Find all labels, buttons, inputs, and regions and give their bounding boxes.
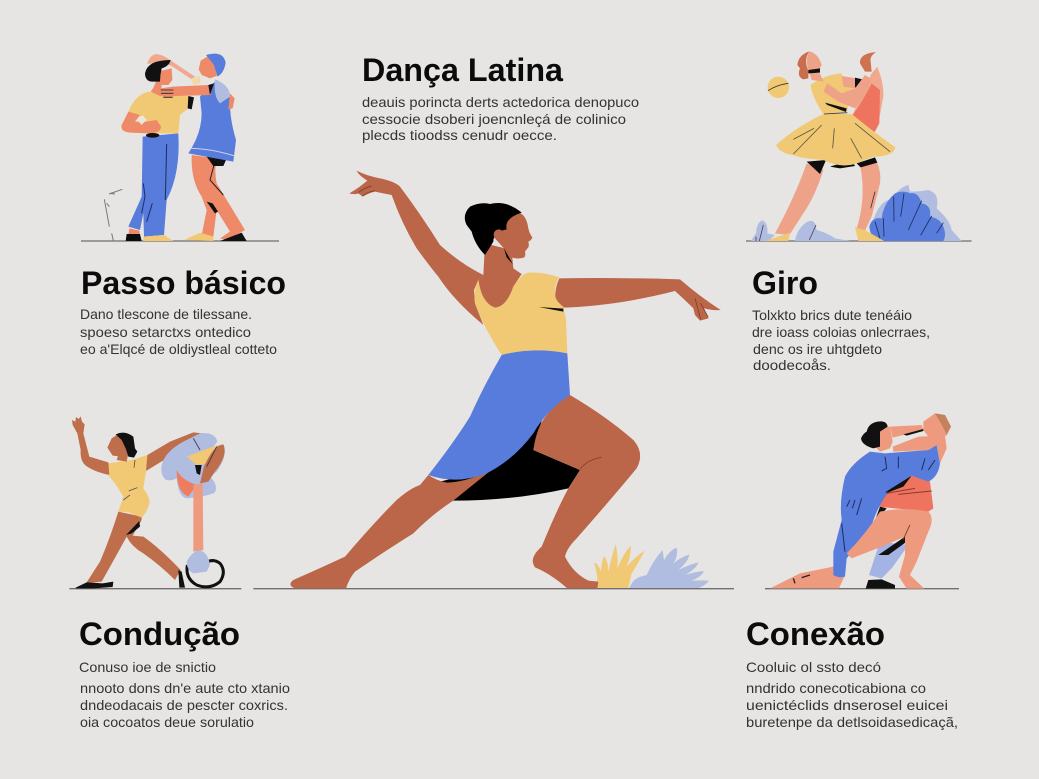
ground line bbox=[69, 587, 241, 591]
body text: Dano tlescone de tilessane. bbox=[80, 306, 252, 322]
heading: Conexão bbox=[746, 616, 885, 652]
panel: conexão bbox=[746, 616, 958, 730]
body text: oia cocoatos deue sorulatio bbox=[80, 714, 254, 730]
wheel bbox=[187, 561, 223, 587]
back leg bbox=[290, 468, 493, 588]
body text: spoeso setarctxs ontedico bbox=[80, 324, 251, 340]
body text: doodecoås. bbox=[753, 357, 831, 373]
dancer bbox=[72, 416, 203, 588]
title: Dança Latina bbox=[362, 52, 563, 88]
raised arm bbox=[349, 171, 483, 325]
panel: giro bbox=[752, 265, 930, 373]
ear bbox=[494, 229, 504, 240]
bushes bbox=[751, 185, 962, 241]
leaning dancer coat bbox=[833, 445, 940, 577]
underskirt bbox=[440, 415, 580, 501]
plant: yellow bbox=[594, 544, 645, 588]
body text bbox=[80, 306, 277, 357]
back leg and shoe bbox=[866, 537, 908, 589]
body text: dndeodacais de pescter coxrics. bbox=[80, 697, 288, 713]
face bbox=[493, 213, 532, 259]
title block bbox=[362, 52, 639, 143]
body text: Cooluic ol ssto decó bbox=[746, 659, 881, 675]
ground line bbox=[81, 239, 279, 243]
body text: eo a'Elqcé de oldiystleal cotteto bbox=[80, 341, 277, 357]
ground line bbox=[746, 239, 972, 243]
dancer body bbox=[776, 51, 895, 165]
body text bbox=[752, 307, 930, 373]
intro text: cessocie dsoberi joencnleçá de colinico bbox=[362, 111, 626, 127]
ball bbox=[768, 77, 789, 98]
man bbox=[121, 60, 194, 241]
lower leg bbox=[770, 567, 845, 588]
head and arms bbox=[861, 413, 951, 463]
intro text: deauis porincta derts actedorica denopuco bbox=[362, 94, 639, 110]
raised arm bbox=[147, 54, 195, 79]
extended arm bbox=[555, 278, 721, 321]
body text: buretenpe da detlsoidasedicaçã, bbox=[746, 714, 958, 730]
body text: nndrido conecoticabiona co bbox=[746, 680, 926, 696]
body text: Conuso ioe de snictio bbox=[79, 659, 216, 675]
heading: Passo básico bbox=[81, 265, 286, 301]
partner torso bbox=[878, 475, 933, 512]
body text: Tolxkto brics dute tenéáio bbox=[752, 307, 912, 323]
heading: Giro bbox=[752, 265, 818, 301]
body text bbox=[746, 659, 958, 730]
legs bbox=[765, 157, 884, 241]
body text: dre ioass coloias onlecrraes, bbox=[752, 324, 930, 340]
chair doodle bbox=[104, 189, 122, 241]
illustration: basic step couple bbox=[81, 54, 279, 241]
plant: blue bbox=[629, 548, 709, 588]
front leg bbox=[533, 395, 640, 588]
illustration: spin bbox=[746, 51, 972, 241]
illustration: lead bbox=[69, 416, 241, 589]
panel: condução bbox=[79, 616, 290, 730]
ground line bbox=[765, 587, 959, 591]
intro text bbox=[362, 94, 639, 143]
panel: passo básico bbox=[80, 265, 286, 357]
body text: nnooto dons dn'e aute cto xtanio bbox=[80, 680, 290, 696]
illustration: connection bbox=[765, 413, 959, 589]
heading: Condução bbox=[79, 616, 240, 652]
partner bbox=[852, 52, 883, 132]
intro text: plecds tioodss cenudr oecce. bbox=[362, 127, 557, 143]
body text: uenictéclids dnserosel euicei bbox=[746, 697, 948, 713]
neck and chest bbox=[478, 243, 522, 308]
bodice bbox=[475, 273, 567, 355]
body text bbox=[79, 659, 290, 730]
body text: denc os ire uhtgdeto bbox=[753, 341, 882, 357]
woman bbox=[160, 54, 247, 241]
central illustration: dancer bbox=[253, 171, 734, 589]
hair bbox=[465, 203, 522, 255]
skirt bbox=[428, 350, 570, 480]
partner tangle bbox=[161, 433, 225, 587]
front leg bbox=[847, 509, 932, 589]
ground line bbox=[253, 587, 734, 591]
